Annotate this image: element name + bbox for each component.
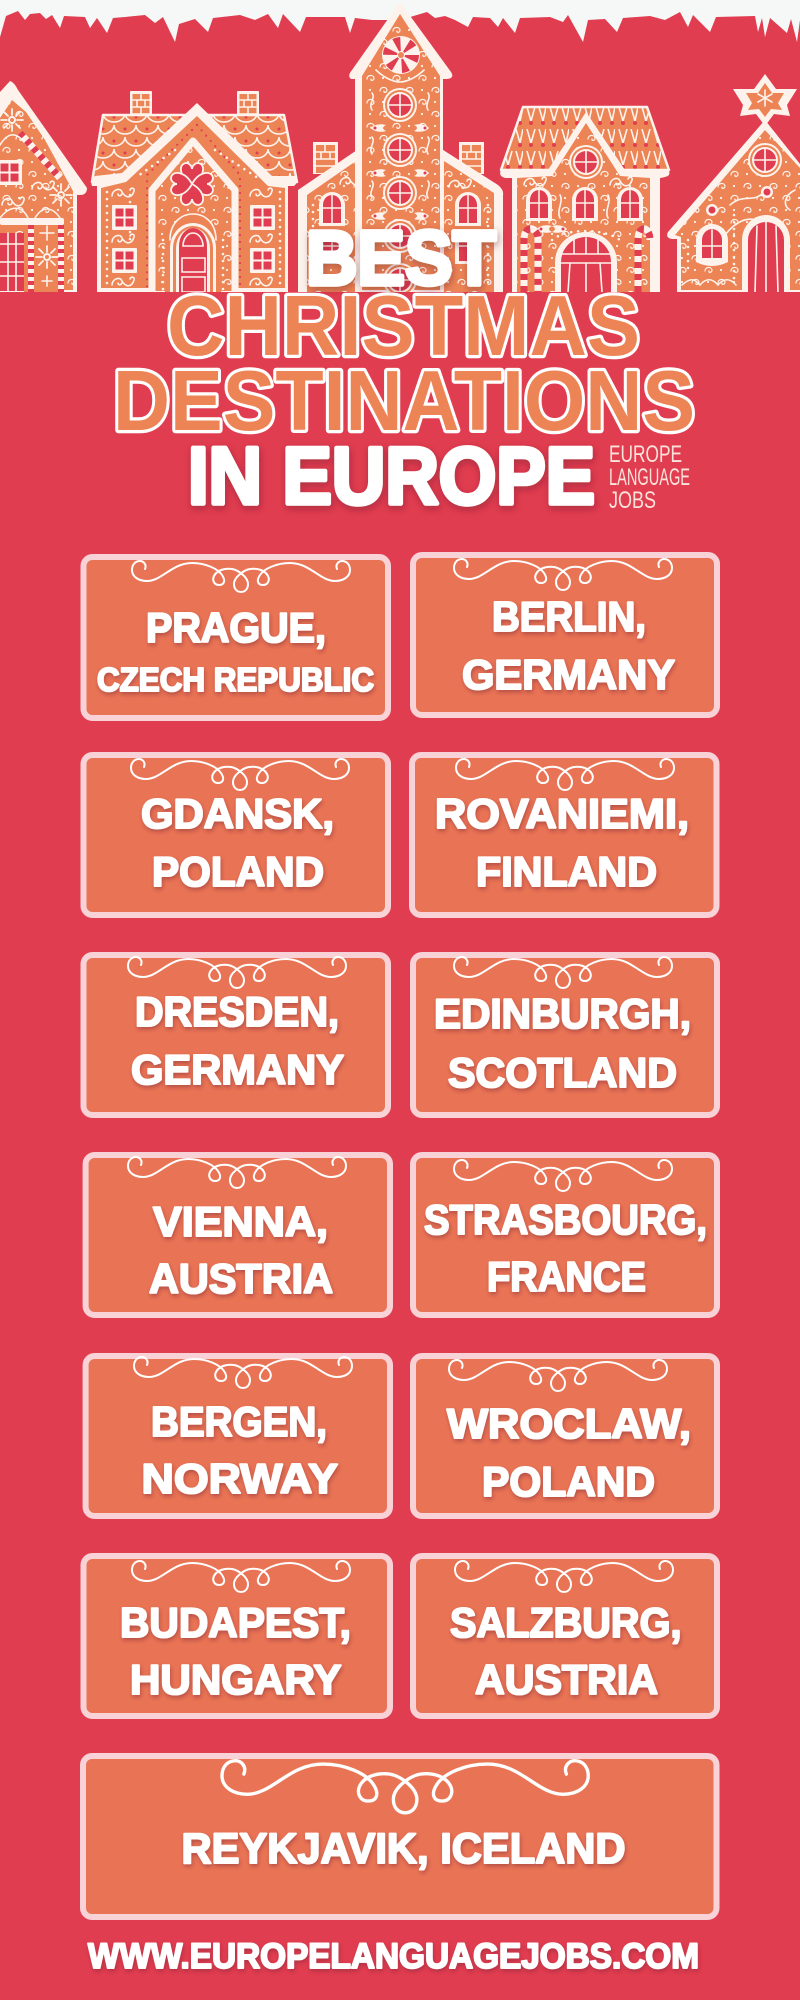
- logo: Europe Language Jobs: LANGUAGE: [609, 464, 690, 491]
- destination name: STRASBOURG,: [424, 1196, 707, 1243]
- flourish: [456, 759, 674, 790]
- logo: Europe Language Jobs: [609, 441, 690, 514]
- flourish: [454, 957, 672, 988]
- door: [555, 232, 617, 292]
- footer: website url: WWW.EUROPELANGUAGEJOBS.COM: [88, 1937, 699, 1976]
- destination name: BUDAPEST,: [120, 1599, 351, 1646]
- destination name: EDINBURGH,: [434, 990, 691, 1037]
- destination name: SCOTLAND: [448, 1049, 677, 1096]
- destination name: [131, 988, 344, 1093]
- chimneys: [130, 91, 259, 114]
- destination name: [450, 1599, 682, 1703]
- destination name: GDANSK,: [141, 790, 334, 837]
- panel: Berlin: [413, 555, 717, 715]
- flourish: [454, 559, 672, 590]
- destination name: HUNGARY: [130, 1656, 342, 1703]
- flourish: [455, 1561, 673, 1592]
- panel: Budapest: [84, 1556, 390, 1716]
- panel: Wroclaw: [413, 1356, 717, 1516]
- icon: star: [733, 74, 797, 126]
- heading: CHRISTMAS: CHRISTMAS: [167, 279, 640, 374]
- panel: Reykjavik: [83, 1756, 716, 1917]
- flourish: [134, 1357, 352, 1388]
- snow with icicles: [0, 0, 800, 42]
- house: tiled roof: [500, 107, 670, 292]
- destination name: GERMANY: [131, 1046, 344, 1093]
- flourish: [449, 1360, 667, 1391]
- gingerbread village illustration: [0, 0, 800, 297]
- panel: Gdansk: [84, 755, 388, 915]
- destination name: SALZBURG,: [450, 1599, 682, 1646]
- destination name: [142, 1398, 338, 1502]
- destination name: FINLAND: [476, 848, 657, 895]
- flourish: [132, 1561, 350, 1592]
- destination name: NORWAY: [142, 1455, 338, 1502]
- destination name: BERGEN,: [151, 1398, 327, 1445]
- destination name: [424, 1196, 707, 1300]
- destination name: ROVANIEMI,: [435, 790, 689, 837]
- house: left cottage: [0, 81, 87, 292]
- door: [165, 218, 221, 292]
- panel: Vienna: [86, 1155, 390, 1315]
- destination name: [462, 593, 675, 698]
- church tower: [349, 2, 452, 297]
- destination name: [434, 990, 691, 1096]
- destination name: [141, 790, 334, 895]
- flourish: [128, 1157, 346, 1188]
- destination name: GERMANY: [462, 651, 675, 698]
- flourish: [222, 1761, 588, 1813]
- flourish: [131, 759, 349, 790]
- heading: IN EUROPE: IN EUROPE: [188, 432, 595, 522]
- flourish: [132, 561, 350, 592]
- panel: Strasbourg: [413, 1155, 717, 1315]
- church: right wing: [440, 142, 503, 292]
- church: left wing: [298, 142, 355, 292]
- panel: Prague: [84, 557, 388, 718]
- panel: Dresden: [84, 955, 388, 1115]
- destination name: POLAND: [482, 1458, 655, 1505]
- heart flower: [171, 163, 213, 205]
- destination name: FRANCE: [487, 1253, 646, 1300]
- panel: Bergen: [86, 1356, 390, 1516]
- house: star-topped chapel: [667, 74, 800, 292]
- destination name: [447, 1400, 691, 1505]
- title: [113, 216, 695, 522]
- destination name: AUSTRIA: [149, 1255, 333, 1302]
- panel: Edinburgh: [413, 955, 717, 1115]
- panel: Rovaniemi: [412, 755, 716, 915]
- heading: BEST: BEST: [306, 216, 496, 302]
- destination name: [149, 1198, 333, 1302]
- candy canes: [524, 229, 538, 292]
- destination name: POLAND: [152, 848, 324, 895]
- heading: DESTINATIONS: DESTINATIONS: [113, 354, 695, 449]
- flourish: [454, 1160, 672, 1191]
- destination name: WROCLAW,: [447, 1400, 691, 1447]
- house: scalloped roof: [91, 91, 297, 292]
- destination name: CZECH REPUBLIC: [97, 661, 374, 698]
- logo: Europe Language Jobs: JOBS: [609, 487, 656, 514]
- destination name: VIENNA,: [153, 1198, 328, 1245]
- destination name: AUSTRIA: [475, 1656, 658, 1703]
- destination name: [97, 604, 374, 698]
- logo: Europe Language Jobs: EUROPE: [609, 441, 682, 468]
- destination name: [120, 1599, 351, 1703]
- destination name: PRAGUE,: [146, 604, 326, 651]
- panel: Salzburg: [413, 1556, 717, 1716]
- destination name: [435, 790, 689, 895]
- peppermint: [382, 36, 420, 74]
- destination name: REYKJAVIK, ICELAND: [182, 1825, 626, 1873]
- destination name: DRESDEN,: [135, 988, 339, 1035]
- flourish: [128, 957, 346, 988]
- destination name: BERLIN,: [492, 593, 646, 640]
